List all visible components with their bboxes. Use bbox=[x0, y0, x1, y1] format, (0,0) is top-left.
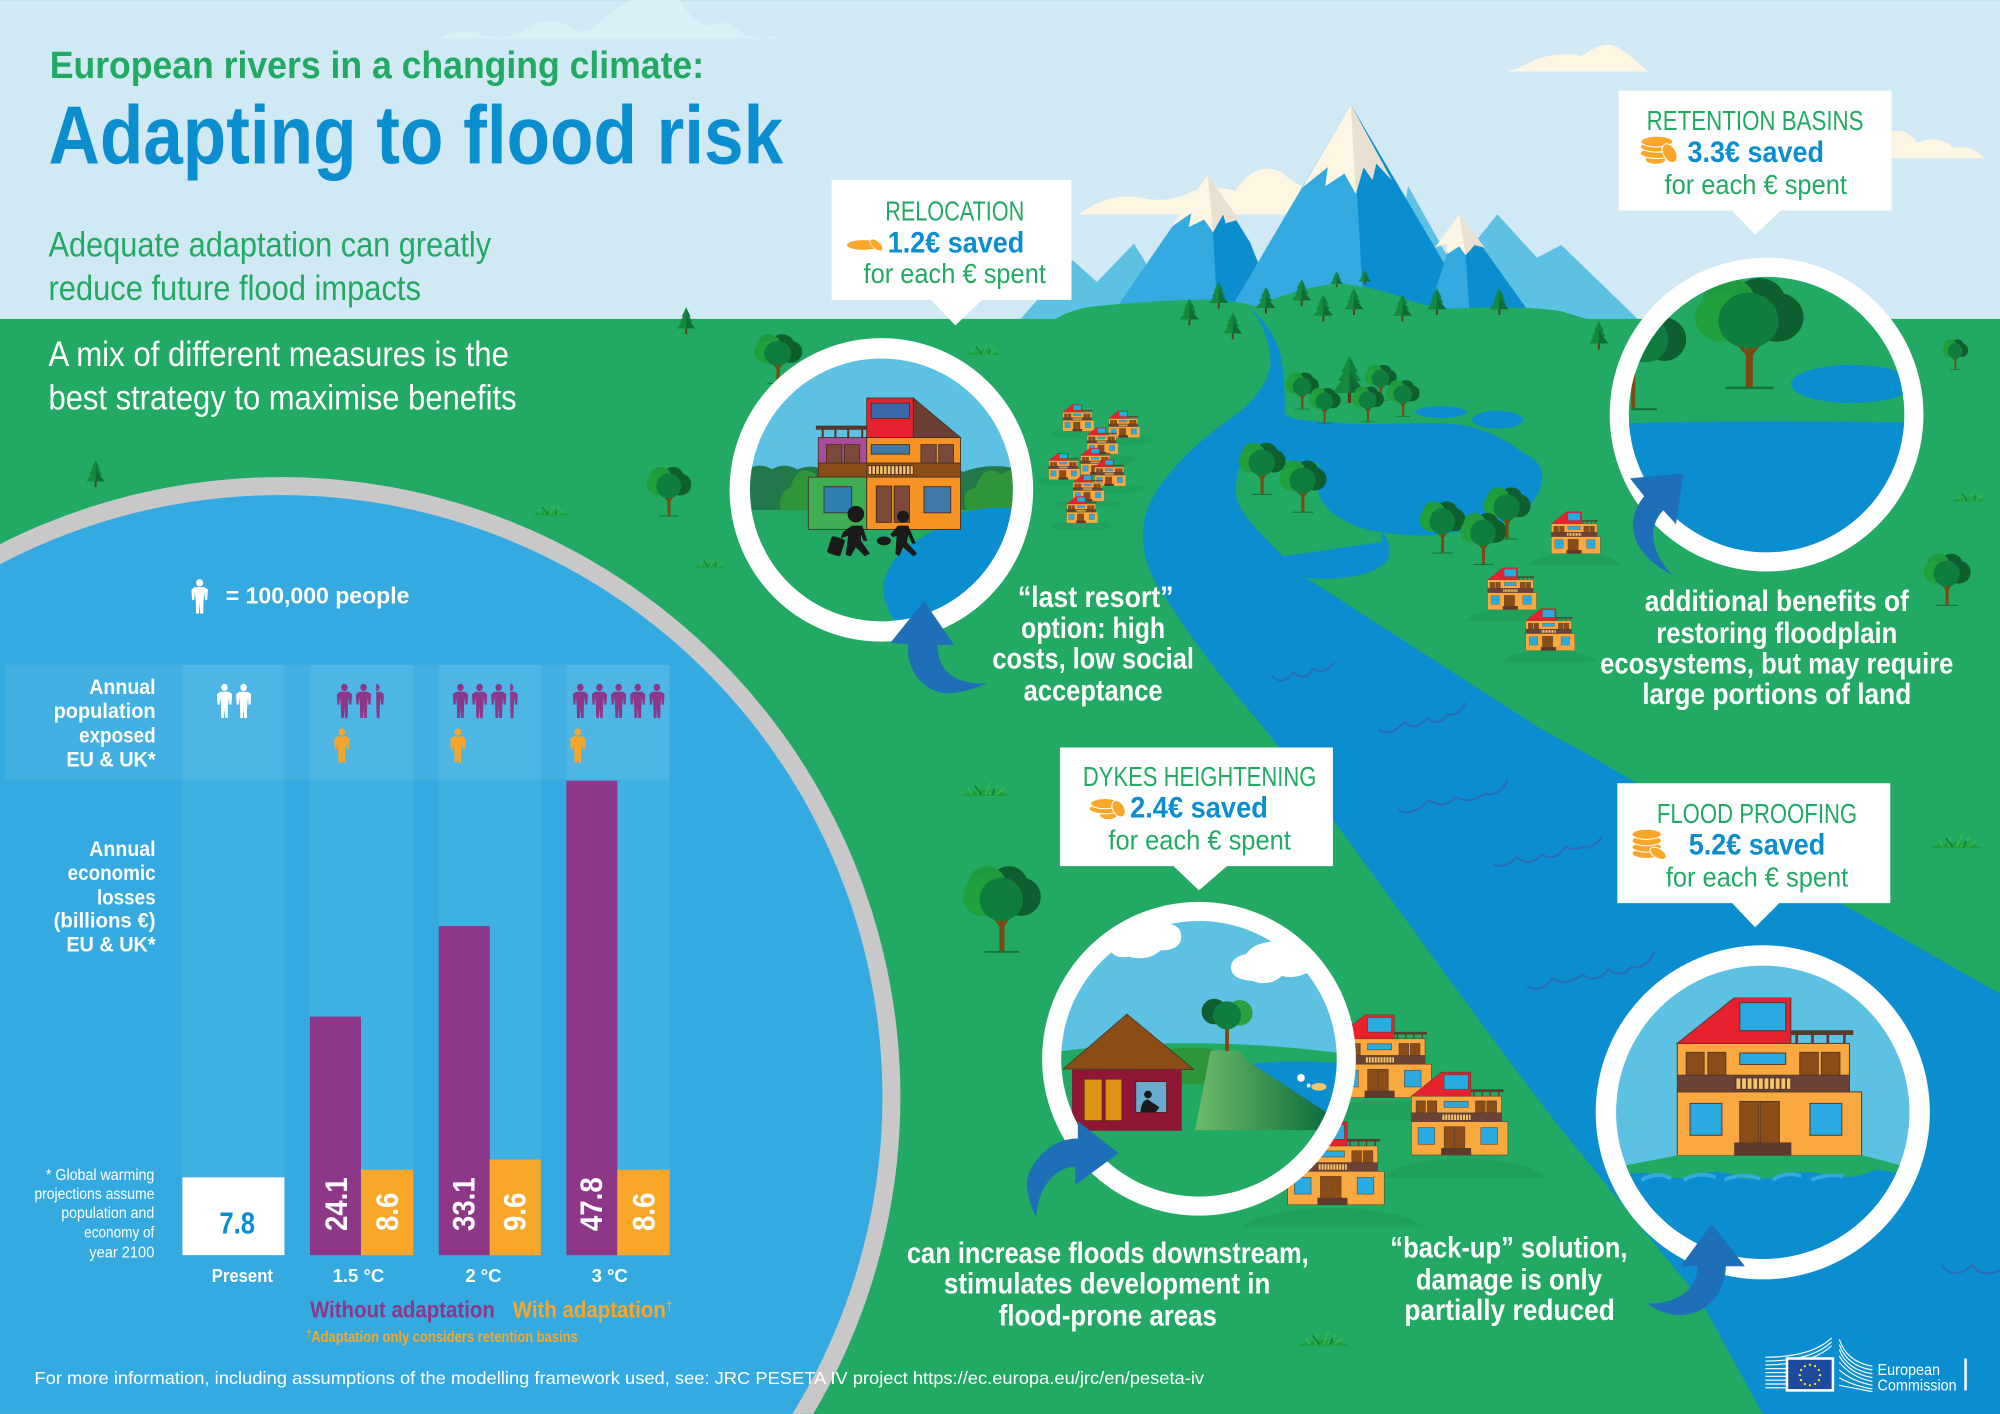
retention ring bbox=[1610, 258, 1923, 572]
relocation arrow bbox=[890, 601, 987, 693]
cloud: cream behind mountains bbox=[1079, 169, 1327, 214]
intro text: green bbox=[48, 225, 491, 308]
relocation note: costs, low social bbox=[992, 642, 1194, 675]
dykes scene bbox=[1061, 921, 1337, 1196]
retention callout bbox=[1619, 91, 1892, 235]
flood proofing house bbox=[1677, 998, 1862, 1156]
footnote: global warming bbox=[34, 1167, 155, 1262]
retention note: ecosystems, but may require bbox=[1600, 648, 1953, 681]
flood proofing arrow bbox=[1647, 1224, 1745, 1315]
small houses near river bbox=[1464, 512, 1622, 662]
panel: flood proofing bbox=[1390, 783, 1930, 1327]
retention note bbox=[1600, 585, 1953, 711]
pine trees bbox=[87, 270, 1608, 487]
chart legend: With adaptation bbox=[513, 1297, 666, 1323]
logo wordmark bbox=[1878, 1362, 1957, 1394]
people legend: = 100,000 people bbox=[226, 582, 409, 608]
relocation callout: RELOCATION bbox=[885, 196, 1024, 227]
people icons: 2 degrees bbox=[450, 684, 518, 763]
chart legend: Adaptation only considers retention basins bbox=[311, 1329, 578, 1346]
chart legend bbox=[306, 1297, 673, 1346]
relocation ring bbox=[730, 338, 1033, 642]
retention note: large portions of land bbox=[1642, 678, 1911, 711]
main mountain bbox=[1232, 105, 1469, 306]
intro text: white bbox=[48, 335, 517, 418]
x axis labels bbox=[212, 1265, 628, 1286]
relocation note bbox=[992, 581, 1194, 707]
dykes callout: 2.4€ saved bbox=[1130, 792, 1268, 825]
ponds bbox=[1416, 406, 1523, 429]
flood proofing callout: FLOOD PROOFING bbox=[1657, 798, 1857, 829]
label: economic losses: (billions €) bbox=[54, 907, 156, 932]
chart background bbox=[0, 495, 882, 1414]
background: sky bbox=[0, 0, 2000, 319]
dykes callout: for each € spent bbox=[1108, 825, 1291, 856]
retention scene bbox=[1628, 276, 1904, 552]
label: economic losses bbox=[54, 836, 156, 957]
panel: relocation bbox=[730, 180, 1194, 707]
background: green land bbox=[0, 319, 2000, 1414]
grass tufts bbox=[532, 344, 1987, 1346]
relocation callout: for each € spent bbox=[864, 258, 1046, 289]
panel: retention basins bbox=[1600, 91, 1953, 711]
dykes callout: DYKES HEIGHTENING bbox=[1083, 761, 1316, 792]
retention callout: for each € spent bbox=[1665, 169, 1847, 200]
river waves bbox=[1272, 662, 2000, 1273]
footnote: global warming: year 2100 bbox=[89, 1245, 154, 1262]
retention callout: RETENTION BASINS bbox=[1647, 105, 1864, 136]
flood proofing scene bbox=[1616, 966, 1910, 1259]
relocation note: “last resort” bbox=[1018, 581, 1173, 614]
population row band bbox=[5, 665, 670, 779]
icon: coins bbox=[1640, 136, 1680, 165]
dykes arrow bbox=[1027, 1121, 1119, 1217]
European Commission logo bbox=[1765, 1338, 1967, 1394]
intro text: green: Adequate adaptation can greatly bbox=[48, 225, 491, 264]
relocation house bbox=[808, 398, 960, 529]
logo wordmark: European bbox=[1878, 1362, 1940, 1379]
subtitle: European rivers in a changing climate: bbox=[50, 44, 704, 87]
round trees bbox=[647, 334, 1971, 953]
x axis labels: 1.5 °C bbox=[333, 1265, 384, 1286]
flood proofing note: “back-up” solution, bbox=[1390, 1232, 1628, 1265]
dykes note: flood-prone areas bbox=[999, 1299, 1217, 1332]
houses beside dykes circle bbox=[1241, 1015, 1547, 1227]
flood proofing note: damage is only bbox=[1416, 1264, 1603, 1297]
retention note: additional benefits of bbox=[1645, 585, 1909, 618]
panel: dykes heightening bbox=[907, 748, 1356, 1332]
logo wordmark: Commission bbox=[1878, 1377, 1957, 1394]
people icons: 3 degrees bbox=[570, 684, 665, 763]
label: economic losses: losses bbox=[97, 884, 156, 909]
bars: 3 degrees bbox=[566, 781, 670, 1255]
bar: present bbox=[182, 1177, 284, 1255]
bar chart bbox=[182, 781, 670, 1255]
relocation note: acceptance bbox=[1024, 674, 1163, 707]
bars: 2 degrees bbox=[439, 926, 541, 1255]
footer source: For more information, including assumptions of the modelling framework used, see: JRC PESETA IV project https://ec.europa.eu/jrc/en/peseta-iv bbox=[34, 1368, 1204, 1388]
river island bbox=[1236, 457, 1381, 556]
icon: coins bbox=[847, 237, 885, 253]
bar: present: 7.8 bbox=[219, 1206, 255, 1240]
label: population exposed: population bbox=[54, 698, 156, 723]
mountains bbox=[1020, 105, 1638, 319]
cloud: cream top right bbox=[1508, 45, 1648, 72]
bars: 1.5 degrees: 24.1 bbox=[318, 1177, 354, 1231]
x axis labels: 3 °C bbox=[592, 1265, 628, 1286]
right mountain bbox=[1429, 214, 1529, 313]
x axis labels: 2 °C bbox=[465, 1265, 502, 1286]
label: population exposed: Annual bbox=[89, 674, 156, 699]
icon: coins bbox=[1089, 798, 1128, 820]
cloud: cream far right bbox=[1892, 131, 1985, 158]
bars: 1.5 degrees: 8.6 bbox=[369, 1193, 405, 1231]
column backgrounds bbox=[182, 665, 670, 1255]
small houses near relocation bbox=[1037, 404, 1154, 531]
intro text: green: reduce future flood impacts bbox=[48, 269, 421, 308]
flood proofing ring bbox=[1596, 945, 1930, 1279]
bars: 2 degrees: 9.6 bbox=[497, 1193, 533, 1231]
flood proofing note: partially reduced bbox=[1404, 1294, 1615, 1327]
retention arrow bbox=[1630, 473, 1684, 575]
dykes clouds bbox=[1110, 923, 1309, 983]
label: population exposed: exposed bbox=[79, 722, 156, 747]
label: economic losses: economic bbox=[68, 860, 156, 885]
icon: coins bbox=[1632, 829, 1668, 862]
river and lake bbox=[1143, 306, 2000, 1414]
dykes note bbox=[907, 1237, 1309, 1332]
flood proofing callout bbox=[1617, 783, 1890, 927]
dykes note: can increase floods downstream, bbox=[907, 1237, 1309, 1270]
dykes note: stimulates development in bbox=[944, 1267, 1270, 1300]
intro text: white: best strategy to maximise benefits bbox=[48, 379, 517, 418]
relocation callout bbox=[832, 180, 1071, 325]
logo stars bbox=[1799, 1364, 1821, 1386]
left mountain bbox=[1117, 175, 1276, 306]
retention note: restoring floodplain bbox=[1656, 617, 1897, 650]
bars: 2 degrees: 33.1 bbox=[445, 1177, 481, 1231]
dykes callout bbox=[1060, 748, 1333, 890]
hills bbox=[1054, 283, 1591, 320]
retention callout: 3.3€ saved bbox=[1688, 136, 1824, 169]
logo flag bbox=[1787, 1358, 1833, 1390]
chart ring bbox=[0, 477, 900, 1414]
people icons: 1.5 degrees bbox=[334, 684, 384, 763]
footnote: global warming: population and bbox=[61, 1205, 154, 1222]
logo building bbox=[1765, 1338, 1872, 1392]
back range bbox=[1020, 186, 1638, 319]
dykes ring bbox=[1042, 902, 1356, 1216]
relocation callout: 1.2€ saved bbox=[888, 227, 1024, 260]
relocation scene bbox=[750, 358, 1013, 622]
chart legend: Without adaptation bbox=[310, 1297, 495, 1323]
title: Adapting to flood risk bbox=[48, 88, 784, 181]
flood proofing note bbox=[1390, 1232, 1628, 1327]
footnote: global warming: projections assume bbox=[34, 1186, 154, 1203]
footnote: global warming: * Global warming bbox=[46, 1167, 154, 1184]
people icons: present bbox=[217, 684, 251, 718]
intro text: white: A mix of different measures is the bbox=[48, 335, 509, 374]
title block bbox=[48, 44, 784, 181]
label: population exposed: EU & UK* bbox=[66, 747, 156, 772]
flood proofing callout: 5.2€ saved bbox=[1689, 829, 1825, 862]
relocating people bbox=[827, 506, 917, 557]
label: economic losses: Annual bbox=[89, 836, 156, 861]
flood proofing callout: for each € spent bbox=[1666, 862, 1848, 893]
chart legend: † bbox=[666, 1298, 673, 1313]
panel: big chart circle bbox=[0, 477, 900, 1414]
footnote: global warming: economy of bbox=[84, 1224, 155, 1241]
bars: 3 degrees: 8.6 bbox=[625, 1193, 661, 1231]
label: economic losses: EU & UK* bbox=[66, 932, 156, 957]
bars: 1.5 degrees bbox=[310, 1017, 413, 1255]
cloud: pale top-left bbox=[439, 0, 776, 38]
x axis labels: Present bbox=[212, 1265, 273, 1286]
chart legend: † bbox=[306, 1329, 312, 1340]
label: population exposed bbox=[54, 674, 156, 772]
people legend bbox=[191, 579, 409, 614]
relocation note: option: high bbox=[1021, 612, 1165, 645]
bars: 3 degrees: 47.8 bbox=[573, 1177, 609, 1231]
